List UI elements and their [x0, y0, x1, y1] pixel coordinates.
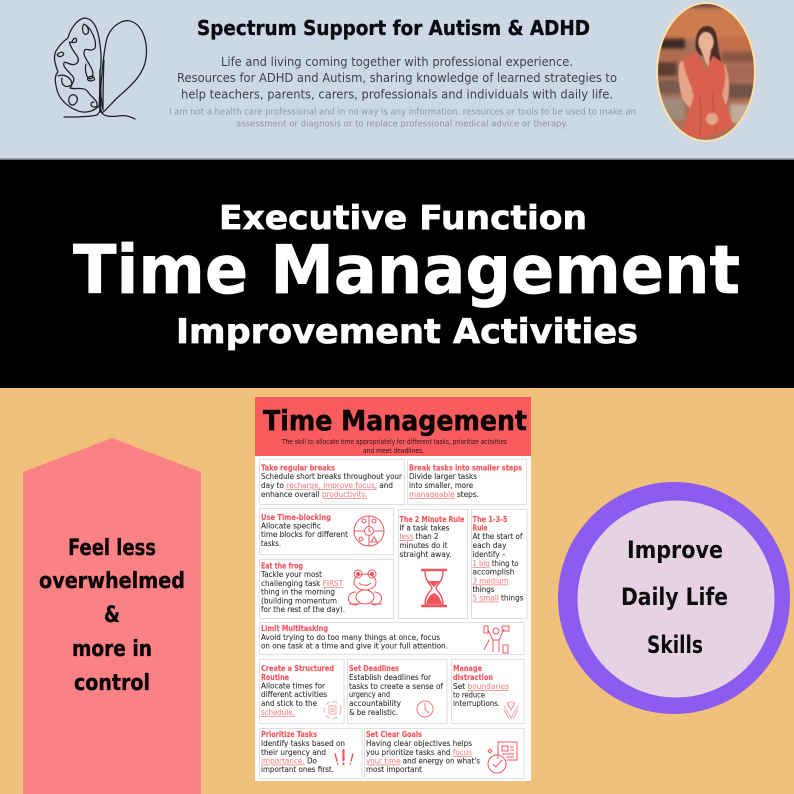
panel: pink arrow callout: control [74, 671, 150, 696]
card: eat the frog: thing in the morning [261, 588, 335, 596]
icon: hourglass [421, 570, 447, 606]
card: eat the frog: Eat the frog [261, 562, 303, 570]
card: take regular breaks: enhance overall productivity. [261, 490, 367, 499]
icon: frog [348, 570, 382, 605]
icon: brain and heart line drawing [55, 18, 146, 119]
panel: time management worksheet preview [255, 397, 531, 781]
card: break tasks into smaller steps: Divide larger tasks [409, 472, 477, 481]
card: take regular breaks: Schedule short breaks throughout your [261, 472, 403, 481]
card: the 1-3-5 rule: 3 medium [472, 576, 508, 586]
header intro text: Life and living coming together with professional experience. [221, 54, 573, 69]
card: set clear goals: Set Clear Goals [366, 730, 422, 739]
panel: pink arrow callout: more in [72, 637, 152, 662]
card: create a structured routine: and stick to the [261, 699, 317, 708]
card: create a structured routine: different activities [261, 690, 327, 699]
header intro text [177, 54, 617, 102]
card: set clear goals [364, 728, 524, 778]
card: the 2 minute rule: less than 2 [400, 532, 439, 541]
card: create a structured routine: Routine [261, 673, 289, 682]
card: the 1-3-5 rule: things [472, 585, 495, 594]
icon: routine cycle [324, 702, 341, 718]
card: limit multitasking: Limit Multitasking [261, 624, 328, 633]
card: prioritize tasks: Identify tasks based on [261, 739, 345, 748]
card: the 1-3-5 rule [472, 510, 527, 618]
black title band [0, 160, 794, 388]
card: set deadlines: Set Deadlines [349, 664, 399, 673]
card: the 1-3-5 rule: each day [472, 541, 507, 550]
header band [0, 0, 794, 160]
header intro text: help teachers, parents, carers, professionals and individuals with daily life. [181, 86, 613, 102]
card: take regular breaks: day to recharge, improve focus, and [261, 481, 393, 490]
panel: purple circle callout: Daily Life [621, 583, 728, 611]
card: take regular breaks [260, 460, 404, 504]
card: the 1-3-5 rule: 1 big thing to [472, 559, 519, 568]
card: manage distraction: interruptions. [453, 699, 500, 708]
main heading: Time Management [73, 231, 740, 309]
disclaimer text [169, 108, 636, 130]
panel: purple circle callout: Skills [647, 631, 703, 659]
panel: purple circle callout: Improve [627, 536, 723, 564]
worksheet header: and meet deadlines. [363, 447, 424, 455]
card: the 2 minute rule: If a task takes [400, 524, 450, 532]
card: the 1-3-5 rule: accomplish [472, 568, 515, 576]
icon: hands and shield [504, 702, 518, 719]
card: create a structured routine: Allocate times for [261, 682, 326, 690]
card: manage distraction: distraction [453, 673, 493, 682]
card: set clear goals: you prioritize tasks and focus [366, 748, 472, 757]
panel: pink arrow callout: & [104, 603, 120, 628]
card: the 2 minute rule: minutes do it [400, 541, 448, 550]
card: set deadlines: & be realistic. [349, 708, 398, 717]
card: set deadlines: urgency and [349, 690, 390, 699]
worksheet header: The skill to allocate time appropriately for different tasks, prioritize activities [281, 438, 507, 446]
card: prioritize tasks [260, 728, 362, 778]
worksheet header [255, 397, 531, 456]
worksheet header: Time Management [263, 405, 527, 437]
card: manage distraction: Manage [453, 664, 482, 673]
card: prioritize tasks: their urgency and [261, 748, 326, 757]
icon: exclamation marks [335, 750, 353, 764]
card: eat the frog: Tackle your most [260, 570, 322, 579]
icon: time wheel [354, 516, 384, 546]
portrait photo [656, 2, 756, 142]
card: manage distraction [452, 660, 524, 724]
card: set deadlines: tasks to create a sense of [349, 682, 443, 691]
card: eat the frog: (building momentum [261, 596, 337, 606]
card: break tasks into smaller steps [408, 460, 526, 504]
card: the 1-3-5 rule: 5 small things [472, 594, 524, 602]
card: set clear goals: your time and energy on what's [366, 756, 480, 766]
lower gold background [0, 388, 794, 794]
card: the 1-3-5 rule: At the start of [472, 532, 523, 541]
card: manage distraction: Set boundaries [453, 682, 509, 691]
card: limit multitasking: on one task at a time and give it your full attention. [261, 642, 448, 650]
panel: pink arrow callout: overwhelmed [39, 569, 185, 594]
disclaimer text: I am not a health care professional and in no way is any information, resources or tools to be used to make an [169, 108, 636, 118]
icon: checklist and tick [488, 742, 517, 773]
card: prioritize tasks: important ones first. [261, 765, 334, 774]
card: eat the frog [260, 560, 394, 618]
card: the 1-3-5 rule: The 1-3-5 [472, 515, 508, 524]
card: manage distraction: to reduce [453, 690, 485, 700]
icon: clock [417, 701, 433, 717]
card: limit multitasking: Avoid trying to do too many things at once, focus [261, 633, 440, 642]
panel: purple circle callout [558, 482, 790, 714]
card: set deadlines: accountability [349, 699, 402, 708]
card: take regular breaks: Take regular breaks [261, 464, 335, 472]
card: break tasks into smaller steps: into smaller, more [409, 481, 473, 490]
card: the 2 minute rule: The 2 Minute Rule [400, 515, 464, 524]
card: create a structured routine [260, 660, 344, 724]
icon: multitasking person [484, 626, 509, 653]
card: limit multitasking [260, 622, 524, 654]
card: the 2 minute rule [398, 510, 468, 618]
header title: Spectrum Support for Autism & ADHD [197, 16, 590, 40]
card: set deadlines: Establish deadlines for [349, 673, 432, 682]
card: eat the frog: for the rest of the day). [261, 605, 345, 614]
card: set deadlines [348, 660, 447, 724]
card: set clear goals: most important [366, 765, 422, 774]
card: prioritize tasks: importance. Do [261, 756, 317, 766]
main heading [73, 198, 740, 352]
card: use time-blocking: Use Time-blocking [261, 513, 331, 522]
card: break tasks into smaller steps: Break tasks into smaller steps [409, 464, 522, 472]
card: use time-blocking: tasks. [261, 539, 281, 548]
card: the 1-3-5 rule: identify – [472, 550, 506, 559]
disclaimer text: assessment or diagnosis or to replace professional medical advice or therapy. [236, 120, 568, 130]
card: break tasks into smaller steps: manageable steps. [409, 490, 479, 499]
card: prioritize tasks: Prioritize Tasks [261, 730, 317, 739]
header intro text: Resources for ADHD and Autism, sharing knowledge of learned strategies to [177, 70, 617, 85]
card: create a structured routine: Create a Structured [261, 664, 334, 673]
card: the 1-3-5 rule: Rule [472, 524, 488, 532]
main heading: Executive Function [219, 198, 587, 237]
card: eat the frog: challenging task FIRST [261, 579, 343, 588]
main heading: Improvement Activities [176, 312, 638, 352]
card: use time-blocking: Allocate specific [261, 522, 321, 530]
card: set clear goals: Having clear objectives helps [366, 739, 472, 748]
panel: pink arrow callout [23, 438, 201, 794]
card: use time-blocking [260, 508, 394, 554]
card: the 2 minute rule: straight away. [400, 550, 452, 559]
card: create a structured routine: schedule. [261, 708, 295, 717]
panel: pink arrow callout: Feel less [68, 536, 156, 561]
card: use time-blocking: time blocks for different [261, 530, 348, 539]
